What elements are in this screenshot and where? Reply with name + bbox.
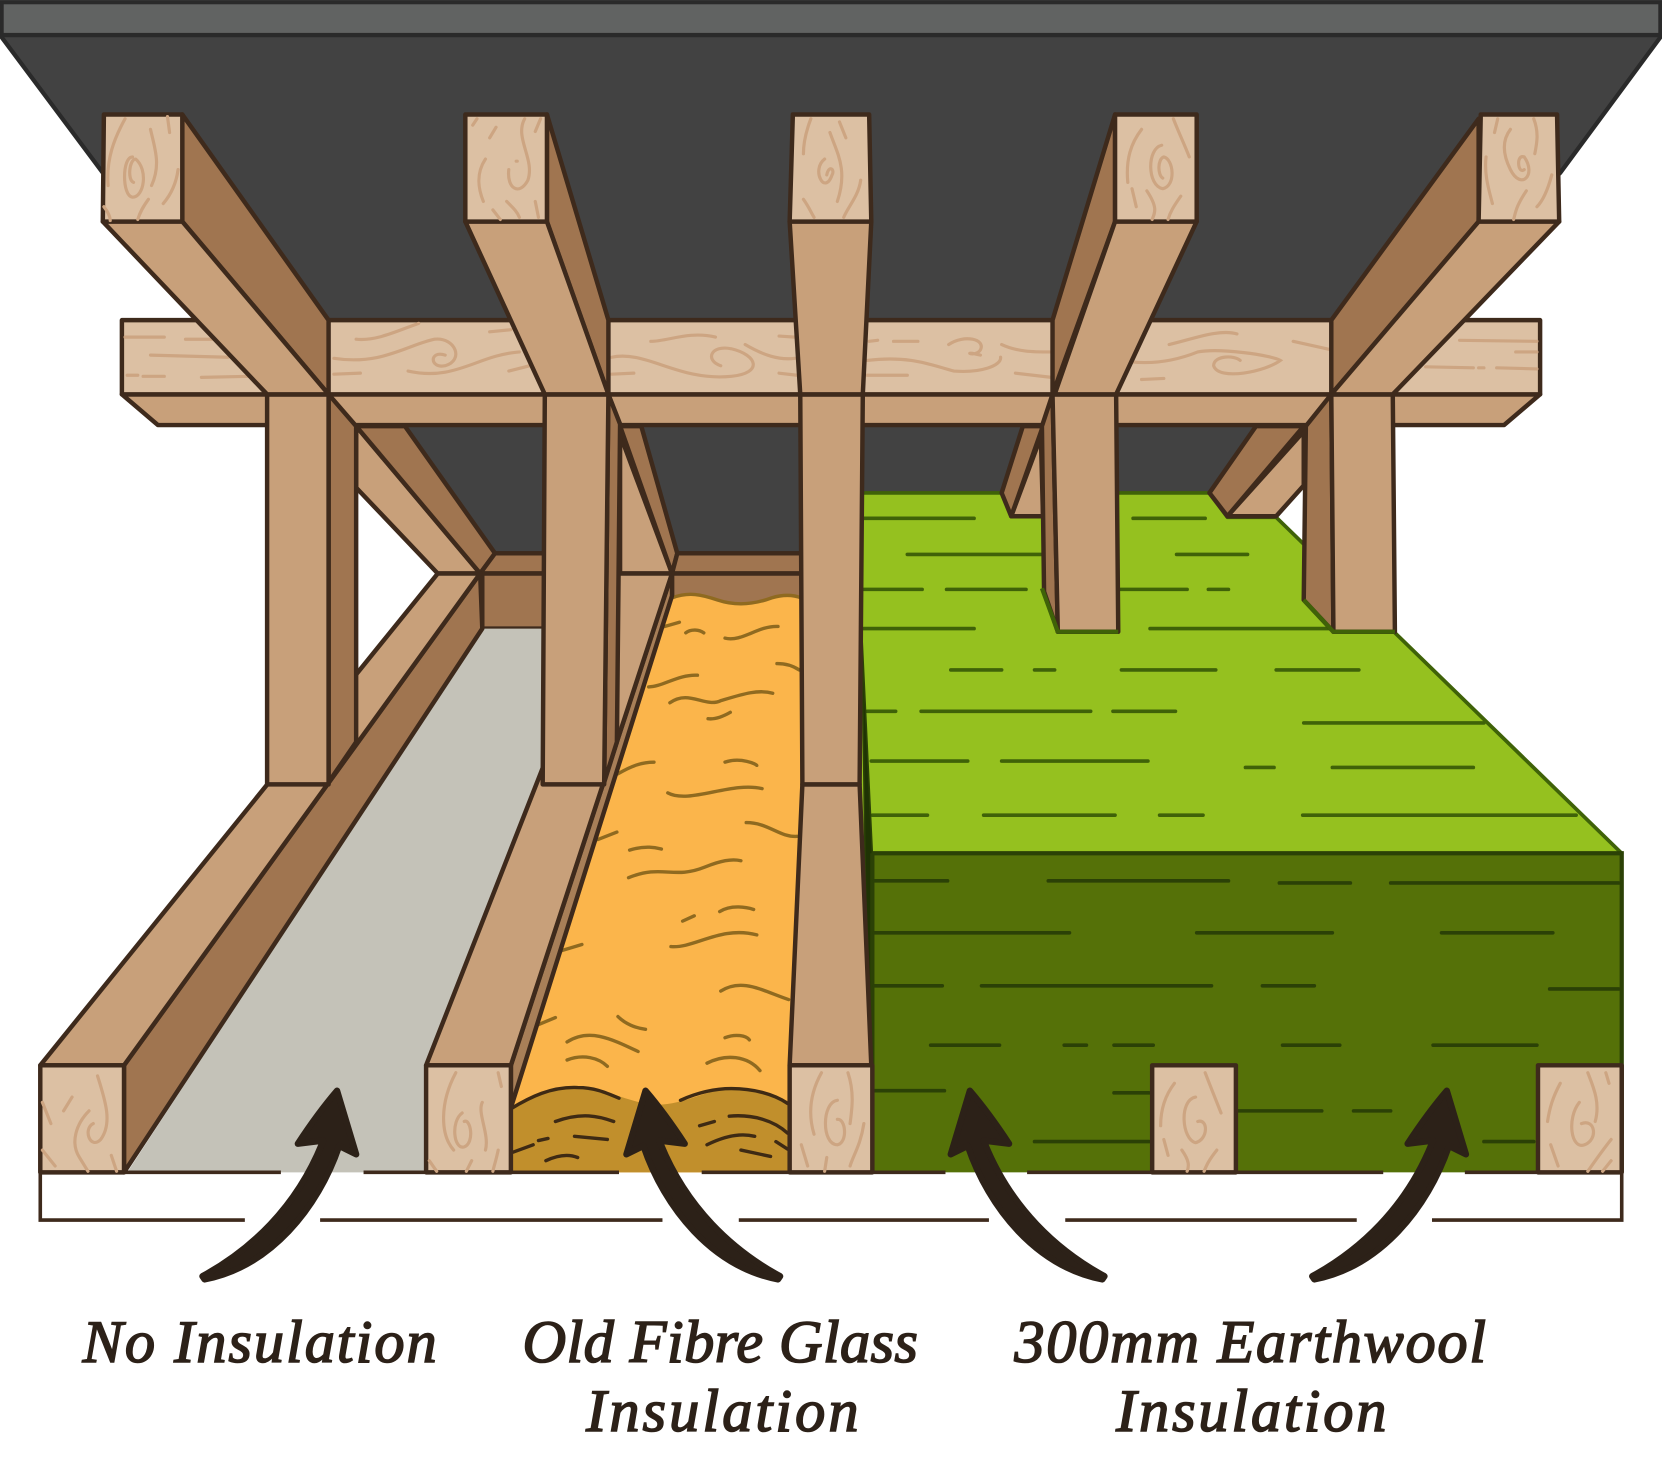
arrow: earthwool left bbox=[951, 1091, 1104, 1279]
first joist bbox=[40, 573, 482, 1172]
rear bay two back wall bbox=[672, 553, 802, 615]
fibre glass cut end outline bbox=[511, 1087, 788, 1109]
fibre glass top outline bbox=[672, 594, 801, 604]
post one bbox=[267, 394, 356, 784]
label line one: Old Fibre Glass bbox=[523, 1309, 918, 1376]
panel: earthwool top surface bbox=[852, 493, 1622, 853]
fibre glass squiggles bbox=[537, 622, 799, 1071]
panel: old fibre glass insulation bbox=[511, 594, 808, 1172]
label line two: Insulation bbox=[585, 1378, 859, 1445]
rear bay one back wall bbox=[480, 553, 547, 629]
post two bbox=[543, 394, 620, 784]
ceiling slab edge lines bbox=[40, 1172, 1622, 1220]
panel: floor joists bbox=[40, 573, 672, 1172]
rafter two bbox=[465, 115, 608, 394]
rear fifth rafter bbox=[1209, 426, 1304, 516]
panel: earthwool front cut face bbox=[862, 632, 1622, 1172]
label: earthwool insulation bbox=[1013, 1309, 1486, 1445]
label line one: 300mm Earthwool bbox=[1013, 1309, 1486, 1376]
panel: no insulation floor bbox=[127, 629, 547, 1172]
beam wood grain bbox=[125, 323, 1537, 380]
earthwool top face bbox=[852, 493, 1622, 853]
beam front face bbox=[122, 320, 1540, 394]
rafter one bbox=[103, 115, 329, 394]
panel: vertical posts bbox=[267, 394, 1395, 784]
joist end block five bbox=[1538, 1065, 1622, 1172]
joist end block three bbox=[790, 1065, 872, 1172]
joist end block one bbox=[40, 1065, 124, 1172]
label line two: Insulation bbox=[1115, 1378, 1386, 1445]
panel: joist end blocks bbox=[40, 1065, 1622, 1172]
horizontal beam underside bbox=[122, 394, 1540, 425]
panel: horizontal beam bbox=[122, 320, 1540, 394]
earthwool side sliver bbox=[862, 632, 873, 1065]
second joist bbox=[426, 573, 672, 1108]
third joist bbox=[790, 784, 871, 1065]
fibre glass cut end bbox=[511, 1087, 793, 1172]
panel: rear timber framing bbox=[356, 426, 1304, 629]
arrow: old fibre glass bbox=[626, 1091, 780, 1279]
post three bbox=[800, 394, 863, 784]
post base green edges bbox=[1042, 588, 1395, 632]
label: no insulation: No Insulation bbox=[82, 1309, 437, 1376]
earthwool front outline bbox=[872, 853, 1622, 1172]
earthwool top texture bbox=[864, 518, 1576, 815]
earthwool front texture bbox=[874, 881, 1619, 1142]
rear left rafter bbox=[356, 426, 495, 573]
rear fourth rafter bbox=[1002, 426, 1043, 516]
post five bbox=[1304, 394, 1395, 632]
ceiling underside bbox=[0, 35, 1662, 553]
arrow: no insulation bbox=[202, 1091, 356, 1279]
label: old fibre glass insulation bbox=[523, 1309, 918, 1445]
earthwool front face bbox=[872, 853, 1622, 1172]
panel: ceiling rafters bbox=[103, 115, 1559, 394]
joist end block two bbox=[426, 1065, 511, 1172]
fibre glass body bbox=[511, 594, 808, 1172]
ceiling top edge bbox=[2, 2, 1660, 35]
arrow: earthwool right bbox=[1312, 1091, 1466, 1279]
rafter three bbox=[790, 115, 871, 394]
joist end block four bbox=[1152, 1065, 1236, 1172]
rear second rafter bbox=[620, 426, 677, 573]
fibre glass cut end squiggles bbox=[513, 1116, 788, 1161]
post four bbox=[1042, 394, 1118, 632]
rafter four bbox=[1053, 115, 1197, 394]
rafter five bbox=[1331, 115, 1559, 394]
